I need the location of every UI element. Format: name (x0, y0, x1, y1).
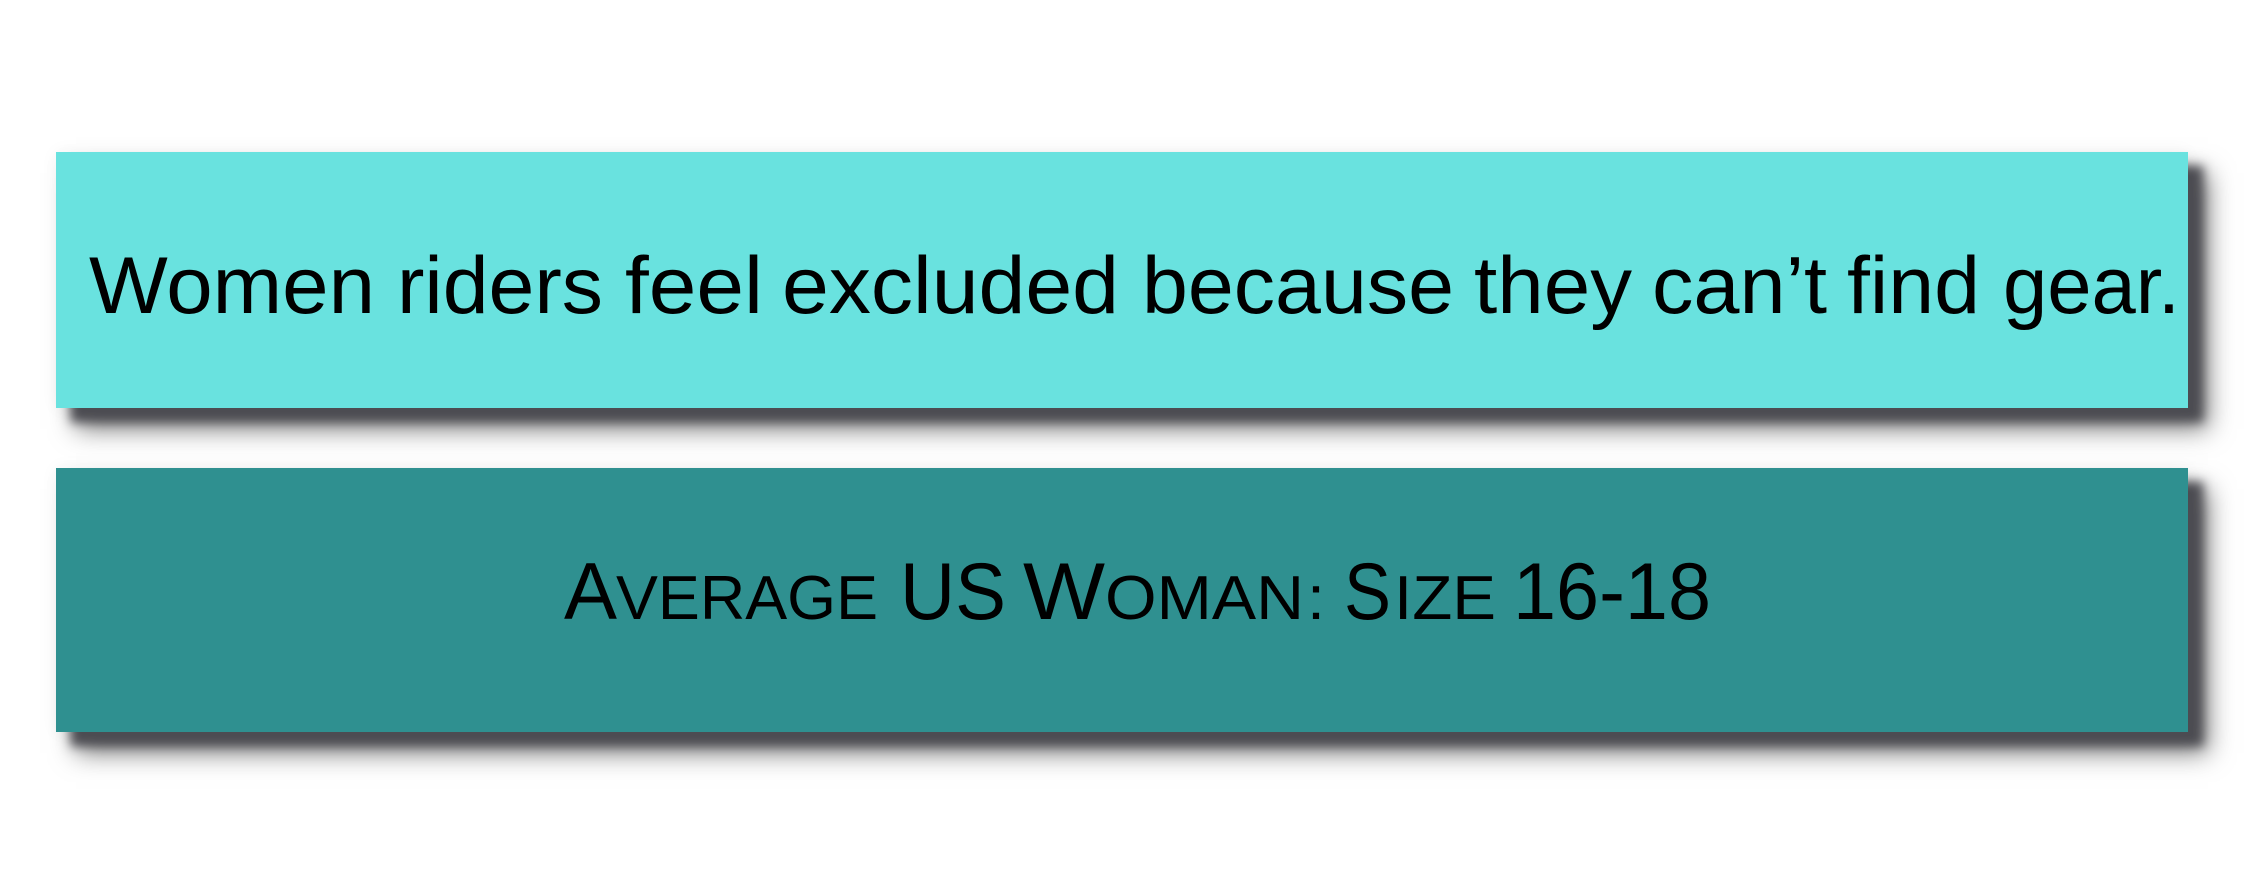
panel: women riders statement (56, 152, 2188, 408)
heading: women riders feel excluded because they can't find gear (89, 241, 2180, 331)
heading: average US woman size 16-18: 16-18 (1513, 547, 1711, 637)
heading: average US woman size 16-18: A (564, 547, 617, 637)
heading: women riders feel excluded because they can't find gear: feel (625, 241, 763, 331)
heading: women riders feel excluded because they can't find gear: Women (89, 241, 375, 331)
heading: women riders feel excluded because they can't find gear: because (1142, 241, 1454, 331)
heading: women riders feel excluded because they can't find gear: riders (397, 241, 603, 331)
heading: average US woman size 16-18: W (1023, 547, 1106, 637)
heading: women riders feel excluded because they can't find gear: they (1474, 241, 1633, 331)
heading: average US woman size 16-18: S (1344, 547, 1391, 637)
heading: average US woman size 16-18: VERAGE (616, 564, 878, 633)
heading: average US woman size 16-18: IZE (1394, 564, 1496, 633)
heading: women riders feel excluded because they can't find gear: find (1847, 241, 1980, 331)
heading: women riders feel excluded because they can't find gear: gear. (2003, 241, 2180, 331)
heading: women riders feel excluded because they can't find gear: can’t (1652, 241, 1827, 331)
heading: average US woman size 16-18: : (1307, 564, 1325, 633)
heading: average US woman size 16-18: OMAN (1105, 564, 1304, 633)
heading: average US woman size 16-18 (564, 547, 1711, 637)
heading: women riders feel excluded because they can't find gear: excluded (782, 241, 1119, 331)
panel: average US woman size (56, 468, 2188, 732)
heading: average US woman size 16-18: US (900, 547, 1006, 637)
